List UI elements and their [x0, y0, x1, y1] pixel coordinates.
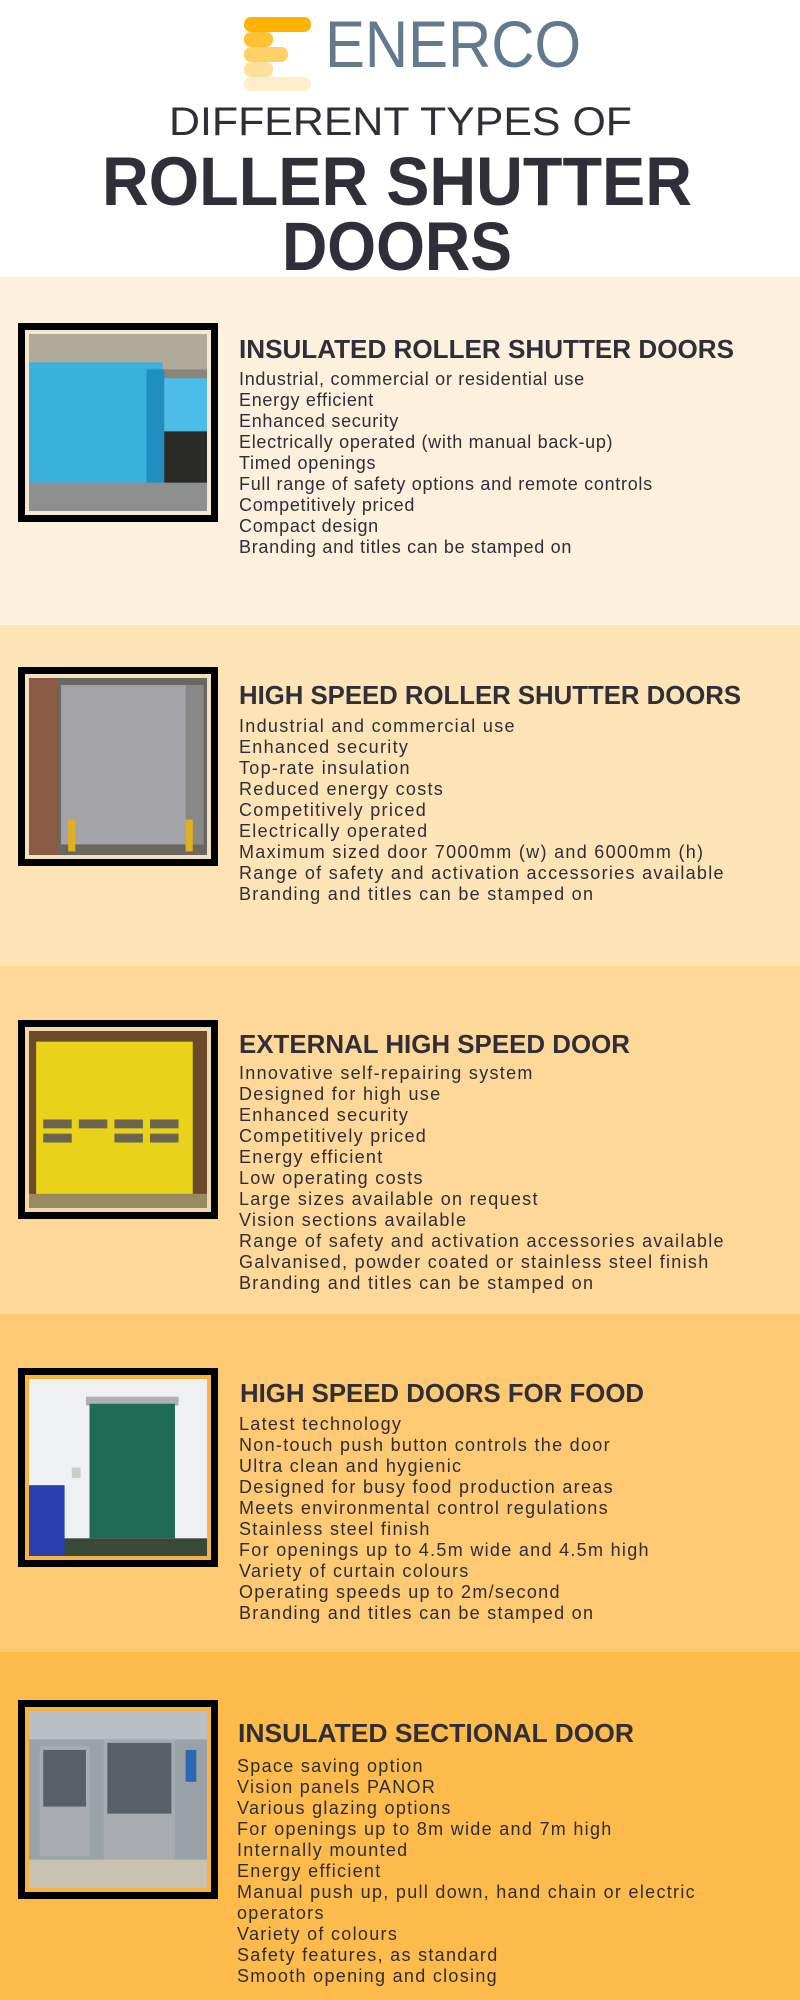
feature list: Branding and titles can be stamped on — [239, 1603, 594, 1623]
panel: high speed doors for food — [0, 1314, 800, 1652]
feature list — [239, 1063, 725, 1293]
feature list: Operating speeds up to 2m/second — [239, 1582, 561, 1602]
feature list: Enhanced security — [239, 1105, 409, 1125]
feature list: Branding and titles can be stamped on — [239, 1273, 594, 1293]
header — [102, 7, 692, 277]
image: blue shutter — [18, 323, 218, 522]
heading: HIGH SPEED DOORS FOR FOOD — [240, 1378, 644, 1408]
feature list: Various glazing options — [237, 1798, 452, 1818]
feature list: Internally mounted — [237, 1840, 408, 1860]
feature list: Branding and titles can be stamped on — [239, 537, 572, 557]
feature list: Innovative self-repairing system — [239, 1063, 534, 1083]
logo text: ENERCO — [325, 7, 581, 81]
feature list: Timed openings — [239, 453, 376, 473]
heading: EXTERNAL HIGH SPEED DOOR — [239, 1029, 630, 1059]
title — [102, 143, 692, 285]
feature list — [239, 716, 725, 904]
feature list: For openings up to 8m wide and 7m high — [237, 1819, 613, 1839]
feature list: Top-rate insulation — [239, 758, 411, 778]
panel: high speed roller shutter doors — [0, 625, 800, 966]
feature list: Energy efficient — [237, 1861, 382, 1881]
feature list: Branding and titles can be stamped on — [239, 884, 594, 904]
feature list — [239, 1414, 650, 1623]
feature list: Vision panels PANOR — [237, 1777, 436, 1797]
logo icon — [244, 17, 311, 91]
feature list: Compact design — [239, 516, 379, 536]
feature list: Range of safety and activation accessories available — [239, 863, 725, 883]
feature list: Industrial, commercial or residential use — [239, 369, 585, 389]
feature list: Space saving option — [237, 1756, 424, 1776]
feature list: Smooth opening and closing — [237, 1966, 498, 1986]
heading: INSULATED SECTIONAL DOOR — [238, 1718, 634, 1748]
feature list: Electrically operated — [239, 821, 428, 841]
feature list: Competitively priced — [239, 1126, 427, 1146]
feature list: Variety of colours — [237, 1924, 398, 1944]
feature list: Large sizes available on request — [239, 1189, 539, 1209]
feature list: Enhanced security — [239, 411, 399, 431]
panel: external high speed door — [0, 966, 800, 1314]
feature list: Industrial and commercial use — [239, 716, 516, 736]
feature list: Stainless steel finish — [239, 1519, 431, 1539]
panel: insulated roller shutter doors — [0, 277, 800, 625]
heading: INSULATED ROLLER SHUTTER DOORS — [239, 334, 734, 364]
feature list: For openings up to 4.5m wide and 4.5m high — [239, 1540, 650, 1560]
panel: insulated sectional door — [0, 1652, 800, 2000]
feature list: Non-touch push button controls the door — [239, 1435, 611, 1455]
feature list: Vision sections available — [239, 1210, 467, 1230]
feature list: Variety of curtain colours — [239, 1561, 470, 1581]
feature list: Maximum sized door 7000mm (w) and 6000mm (h) — [239, 842, 704, 862]
feature list: Reduced energy costs — [239, 779, 444, 799]
image: yellow door — [18, 1020, 218, 1219]
subtitle: DIFFERENT TYPES OF — [169, 100, 632, 144]
feature list: Ultra clean and hygienic — [239, 1456, 462, 1476]
feature list: Range of safety and activation accessories available — [239, 1231, 725, 1251]
image: sectional doors — [18, 1700, 218, 1899]
feature list: Energy efficient — [239, 1147, 384, 1167]
image: grey shutter — [18, 667, 218, 866]
feature list: Competitively priced — [239, 800, 427, 820]
feature list: Latest technology — [239, 1414, 402, 1434]
feature list: Full range of safety options and remote controls — [239, 474, 653, 494]
heading: HIGH SPEED ROLLER SHUTTER DOORS — [239, 680, 741, 710]
feature list: Competitively priced — [239, 495, 415, 515]
feature list — [239, 369, 653, 557]
feature list: Meets environmental control regulations — [239, 1498, 609, 1518]
feature list: Galvanised, powder coated or stainless steel finish — [239, 1252, 710, 1272]
feature list: Electrically operated (with manual back-up) — [239, 432, 613, 452]
feature list: Low operating costs — [239, 1168, 424, 1188]
feature list: Enhanced security — [239, 737, 409, 757]
image: green curtain door — [18, 1368, 218, 1567]
feature list: operators — [237, 1903, 325, 1923]
feature list: Designed for high use — [239, 1084, 441, 1104]
feature list — [237, 1756, 696, 1986]
feature list: Manual push up, pull down, hand chain or electric — [237, 1882, 696, 1902]
feature list: Safety features, as standard — [237, 1945, 499, 1965]
feature list: Designed for busy food production areas — [239, 1477, 614, 1497]
title: ROLLER SHUTTER — [102, 143, 692, 220]
feature list: Energy efficient — [239, 390, 374, 410]
